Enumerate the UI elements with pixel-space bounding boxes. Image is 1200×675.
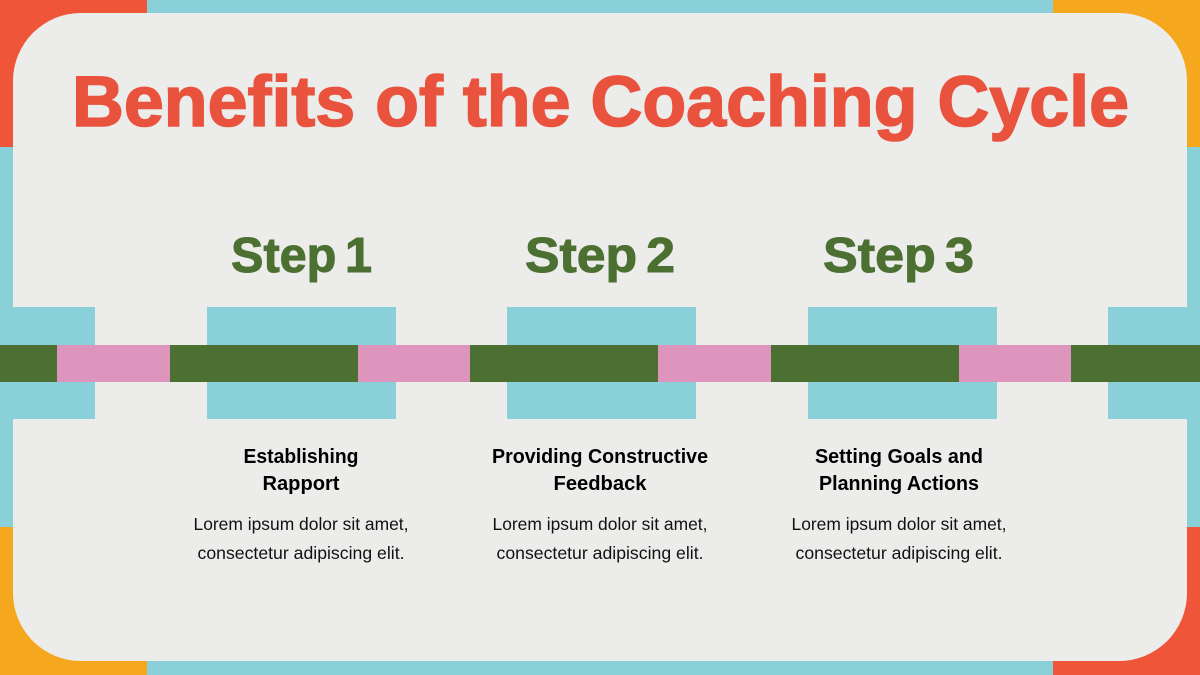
step 2 heading: Feedback (554, 472, 647, 495)
step 2 heading (492, 445, 708, 495)
step 1 heading: Establishing (244, 445, 358, 468)
step 3 body: consectetur adipiscing elit. (796, 543, 1002, 563)
step 3 heading (815, 445, 983, 495)
step 1 heading: Rapport (262, 472, 340, 495)
step 2 body: consectetur adipiscing elit. (496, 543, 704, 563)
step 1 body (194, 514, 408, 563)
step 1 text block (194, 445, 408, 563)
step 3 heading: Setting Goals and (815, 445, 983, 468)
pink segments (57, 345, 1071, 382)
step 3 heading: Planning Actions (819, 472, 979, 495)
step 3 label: Step 3 (823, 229, 974, 283)
step 2 body (492, 514, 708, 563)
step 3 body (792, 514, 1006, 563)
step 2 body: Lorem ipsum dolor sit amet, (492, 514, 708, 534)
step 1 body: consectetur adipiscing elit. (198, 543, 404, 563)
timeline band (0, 307, 1200, 419)
step 2 text block (492, 445, 708, 563)
step 1 body: Lorem ipsum dolor sit amet, (194, 514, 408, 534)
green bar (0, 345, 1200, 382)
step 3 text block (792, 445, 1006, 563)
teal blocks (0, 307, 1200, 419)
step 2 heading: Providing Constructive (492, 445, 708, 468)
step 1 label: Step 1 (231, 229, 372, 283)
step labels (231, 229, 974, 283)
title: Benefits of the Coaching Cycle (72, 63, 1129, 142)
step 3 body: Lorem ipsum dolor sit amet, (792, 514, 1006, 534)
step 2 label: Step 2 (525, 229, 675, 283)
step 1 heading (244, 445, 358, 495)
